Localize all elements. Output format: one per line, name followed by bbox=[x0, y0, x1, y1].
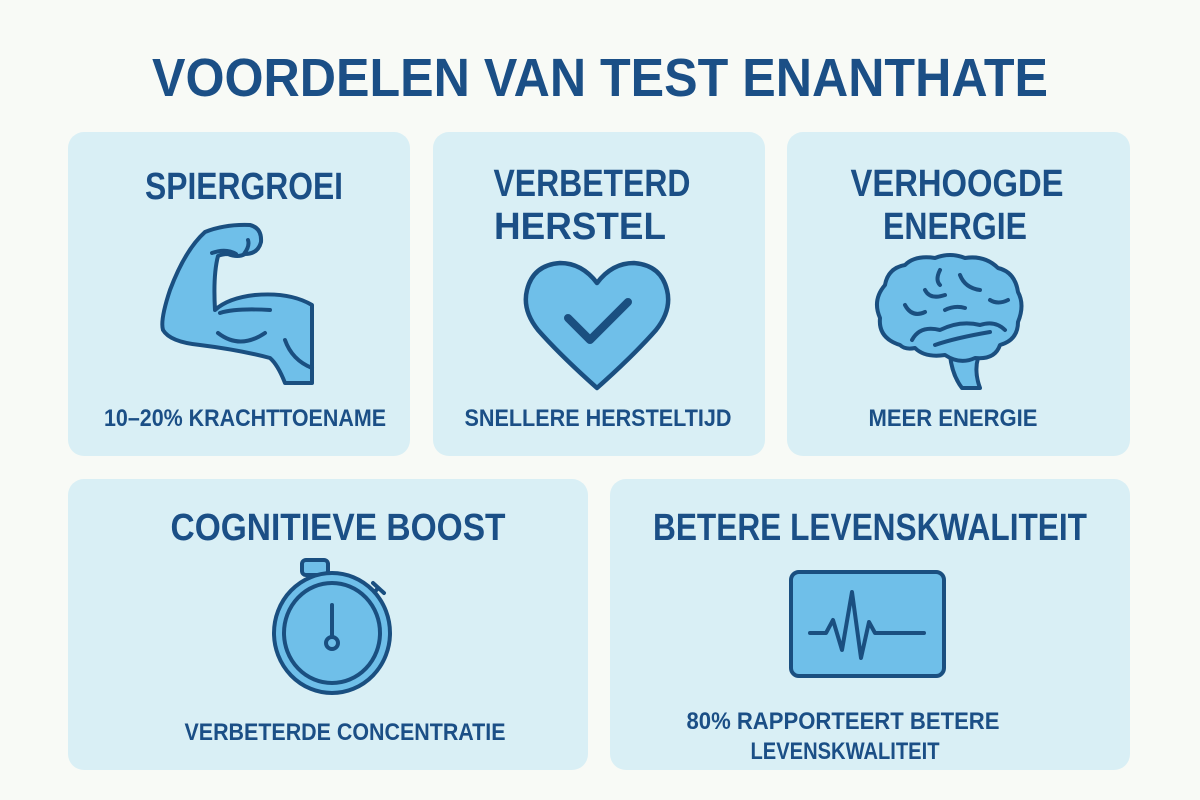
panel: cognitieve boost bbox=[68, 479, 588, 770]
panel: herstel: HERSTEL bbox=[494, 206, 666, 248]
panel: levenskwaliteit: LEVENSKWALITEIT bbox=[750, 738, 940, 765]
stat: snellere hersteltijd: SNELLERE HERSTELTIJD bbox=[464, 405, 732, 432]
panel: levenskwaliteit bbox=[610, 479, 1130, 770]
heading: verbeterd herstel: VERBETERD bbox=[494, 163, 690, 205]
stat: krachttoename: 10–20% KRACHTTOENAME bbox=[104, 405, 386, 432]
icon: heart with check bbox=[526, 263, 668, 388]
heading: spiergroei: SPIERGROEI bbox=[145, 166, 343, 208]
icon: flexed arm bbox=[162, 225, 312, 383]
panel: energie: ENERGIE bbox=[883, 206, 1027, 248]
heading: verhoogde energie: VERHOOGDE bbox=[850, 163, 1064, 205]
heading: betere levenskwaliteit: BETERE LEVENSKWALITEIT bbox=[653, 507, 1087, 549]
panel: spiergroei bbox=[68, 132, 410, 456]
icon: stopwatch bbox=[274, 560, 390, 693]
stat: meer energie: MEER ENERGIE bbox=[868, 405, 1038, 432]
icon: brain bbox=[877, 255, 1022, 388]
heading: cognitieve boost: COGNITIEVE BOOST bbox=[170, 507, 506, 549]
stat: 80% rapporteert: 80% RAPPORTEERT BETERE bbox=[686, 708, 1000, 735]
stat: verbeterde concentratie: VERBETERDE CONCENTRATIE bbox=[184, 719, 506, 746]
panel: herstel bbox=[433, 132, 765, 456]
panel: energie bbox=[787, 132, 1130, 456]
title: VOORDELEN VAN TEST ENANTHATE bbox=[152, 48, 1048, 108]
icon: heart rate monitor bbox=[791, 572, 944, 676]
